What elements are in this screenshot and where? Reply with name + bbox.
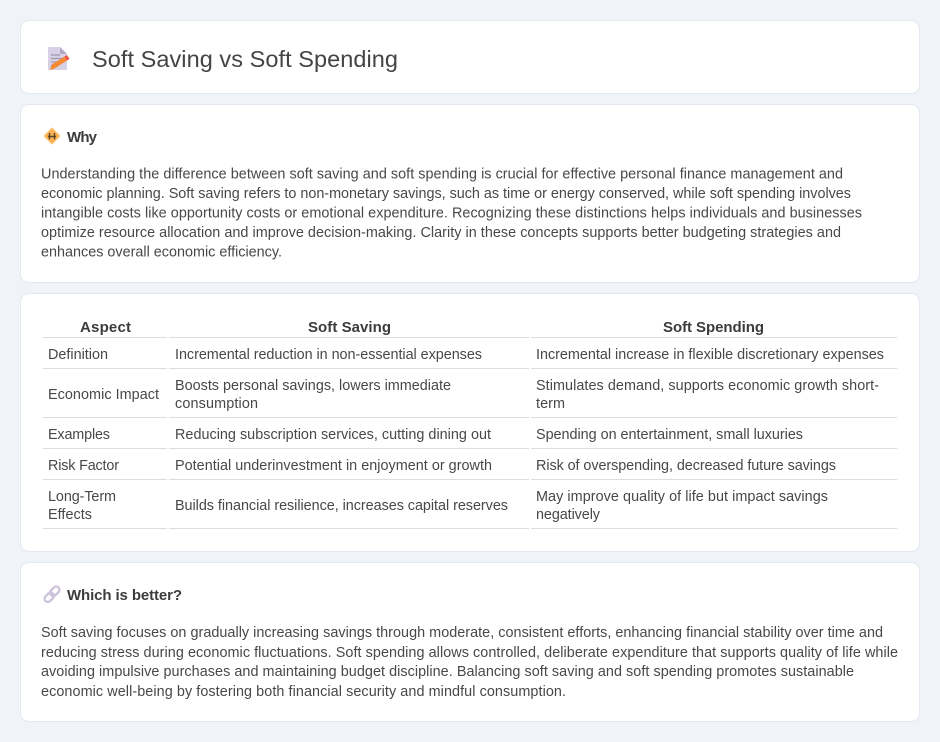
panel: why [20, 104, 920, 282]
table row: long-term effects: Builds financial resilience, increases capital reserves [175, 498, 508, 514]
text block: why paragraph: economic planning. Soft saving refers to non-monetary savings, such as time or energy conserved, while soft spending involves [41, 186, 851, 202]
heading: which is better: Which is better? [67, 587, 182, 604]
text block: why paragraph: Understanding the difference between soft saving and soft spending is crucial for effective personal finance management and [41, 166, 843, 182]
table row: risk factor: Potential underinvestment in enjoyment or growth [175, 458, 492, 474]
icon: chain link [43, 585, 61, 603]
text block: which is better paragraph: avoiding impulsive purchases and maintaining budget discipline. Balancing soft saving and soft spending promotes sustainable [41, 664, 854, 680]
text block: why paragraph [41, 166, 862, 260]
heading: why: Why [67, 129, 98, 146]
table row: risk factor [43, 458, 897, 480]
table row: examples [43, 427, 897, 449]
table row: definition: Definition [48, 347, 108, 363]
table row: definition [43, 347, 897, 369]
text block: which is better paragraph: Soft saving focuses on gradually increasing savings through moderate, consistent efforts, enhancing financial stability over time and [41, 625, 883, 641]
text block: which is better paragraph: economic well-being by fostering both financial security and mindful consumption. [41, 684, 566, 700]
title: Soft Saving vs Soft Spending [92, 46, 398, 72]
panel: title card [20, 20, 920, 94]
table row: economic impact: Boosts personal savings, lowers immediate [175, 378, 451, 394]
table row: long-term effects: negatively [536, 507, 601, 523]
table row: risk factor: Risk Factor [48, 458, 119, 474]
text block: why paragraph: intangible costs like opportunity costs or emotional expenditure. Recognizing these distinctions helps individuals and businesses [41, 206, 862, 222]
table row: definition: Incremental reduction in non-essential expenses [175, 347, 482, 363]
table row: long-term effects: Long-Term [48, 489, 116, 505]
table header: Aspect [80, 319, 131, 336]
table header: Soft Saving [308, 319, 391, 336]
table row: long-term effects: Effects [48, 507, 92, 523]
table row: examples: Reducing subscription services, cutting dining out [175, 427, 491, 443]
table row: economic impact: Economic Impact [48, 387, 159, 403]
table row: economic impact: Stimulates demand, supports economic growth short- [536, 378, 879, 394]
table row: risk factor: Risk of overspending, decreased future savings [536, 458, 836, 474]
icon: document with pencil [48, 47, 70, 70]
text block: why paragraph: optimize resource allocation and improve decision-making. Clarity in these concepts supports better budgeting strategies and [41, 225, 841, 241]
table row: economic impact [43, 378, 897, 418]
table row: examples: Examples [48, 427, 110, 443]
table header: Soft Spending [663, 319, 764, 336]
text block: why paragraph: enhances overall economic efficiency. [41, 244, 282, 260]
text block: which is better paragraph [41, 625, 898, 700]
icon: warning diamond [44, 128, 60, 144]
table row: examples: Spending on entertainment, small luxuries [536, 427, 803, 443]
text block: which is better paragraph: reducing stress during economic fluctuations. Soft spending allows controlled, deliberate expenditure that supports quality of life while [41, 645, 898, 661]
table row: long-term effects [43, 489, 897, 529]
panel: comparison table [20, 294, 920, 552]
table row: economic impact: consumption [175, 396, 258, 412]
table row: economic impact: term [536, 396, 565, 412]
table row: long-term effects: May improve quality of life but impact savings [536, 489, 828, 505]
table row: definition: Incremental increase in flexible discretionary expenses [536, 347, 884, 363]
panel: which is better [20, 562, 920, 722]
table header [43, 319, 897, 338]
